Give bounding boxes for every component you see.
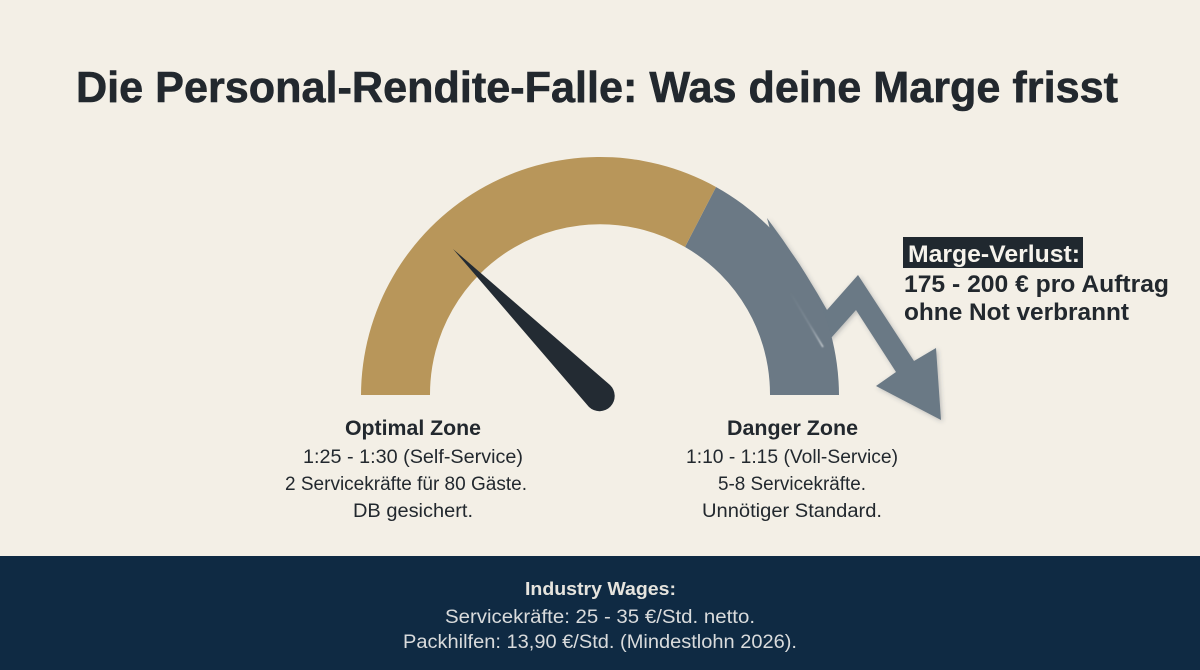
title: Die Personal-Rendite-Falle: Was deine Marge frisst — [76, 63, 1118, 112]
falling arrow — [767, 218, 941, 420]
text block: danger zone — [686, 417, 898, 522]
footer heading: Industry Wages: — [525, 579, 676, 599]
optimal zone ratio: 1:25 - 1:30 (Self-Service) — [303, 447, 523, 468]
arrow highlight edge — [790, 292, 823, 347]
optimal zone heading: Optimal Zone — [345, 417, 481, 440]
danger zone staffing: 5-8 Servicekräfte. — [718, 474, 866, 495]
footer background — [0, 556, 1200, 670]
gauge segment: danger zone — [685, 187, 839, 395]
callout description: ohne Not verbrannt — [904, 299, 1129, 326]
footer band: industry wages — [0, 556, 1200, 670]
optimal zone note: DB gesichert. — [353, 501, 473, 522]
danger zone ratio: 1:10 - 1:15 (Voll-Service) — [686, 447, 898, 468]
callout highlight label: Marge-Verlust: — [908, 241, 1080, 268]
footer line: service staff wage: Servicekräfte: 25 - 35 €/Std. netto. — [445, 607, 755, 628]
gauge chart — [361, 157, 839, 411]
gauge segment: optimal zone — [361, 157, 716, 395]
footer line: packing helper wage: Packhilfen: 13,90 €/Std. (Mindestlohn 2026). — [403, 632, 797, 653]
optimal zone staffing: 2 Servicekräfte für 80 Gäste. — [285, 474, 527, 495]
gauge needle — [453, 249, 615, 411]
danger zone heading: Danger Zone — [727, 417, 858, 440]
text block: optimal zone — [285, 417, 527, 522]
callout amount: 175 - 200 € pro Auftrag — [904, 271, 1169, 298]
callout: margin loss — [903, 237, 1169, 326]
danger zone note: Unnötiger Standard. — [702, 501, 882, 522]
